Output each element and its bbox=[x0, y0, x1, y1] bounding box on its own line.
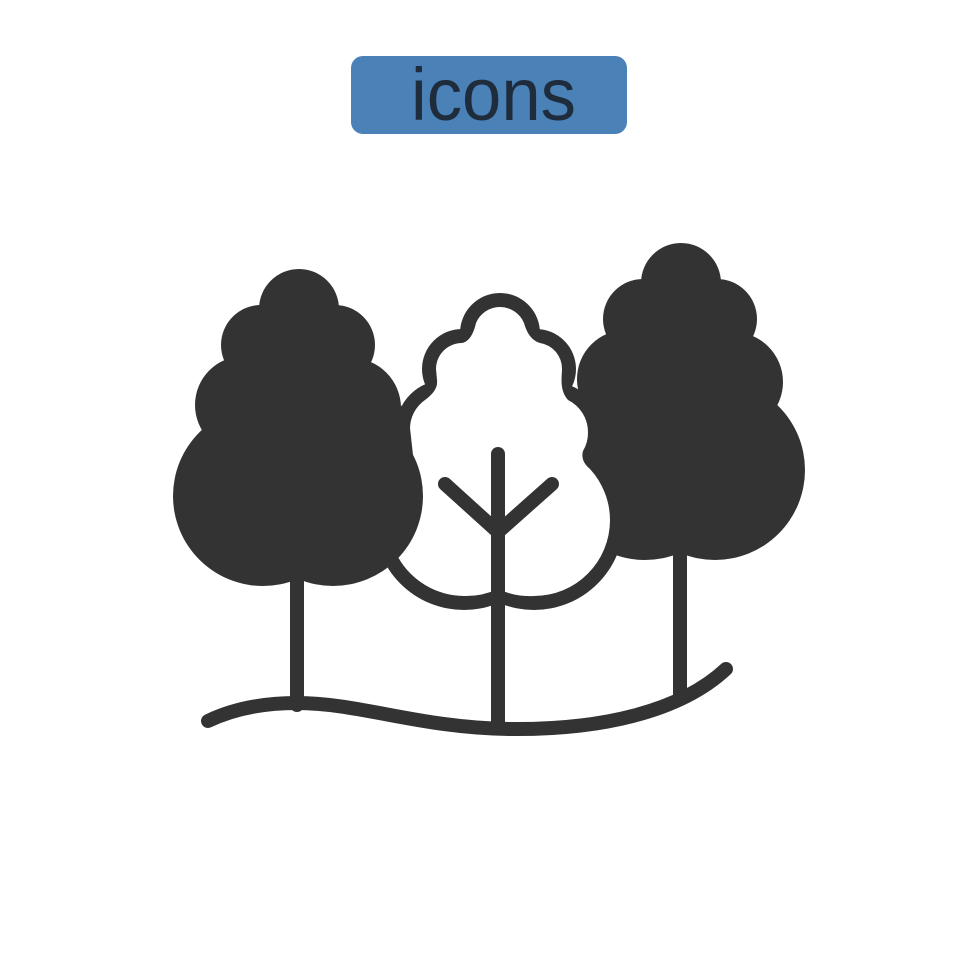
right tree trunk bbox=[673, 550, 687, 698]
badge text: icons bbox=[411, 53, 576, 136]
right tree crown bbox=[555, 243, 805, 560]
left tree crown bbox=[173, 269, 423, 586]
middle tree outline bbox=[374, 293, 624, 610]
badge: icons label bbox=[351, 53, 627, 136]
middle tree interior bbox=[398, 307, 610, 596]
icon: three trees on a hill bbox=[173, 243, 805, 729]
ground line bbox=[208, 669, 726, 729]
left tree trunk bbox=[290, 575, 304, 705]
middle tree trunk and branches bbox=[445, 454, 552, 724]
